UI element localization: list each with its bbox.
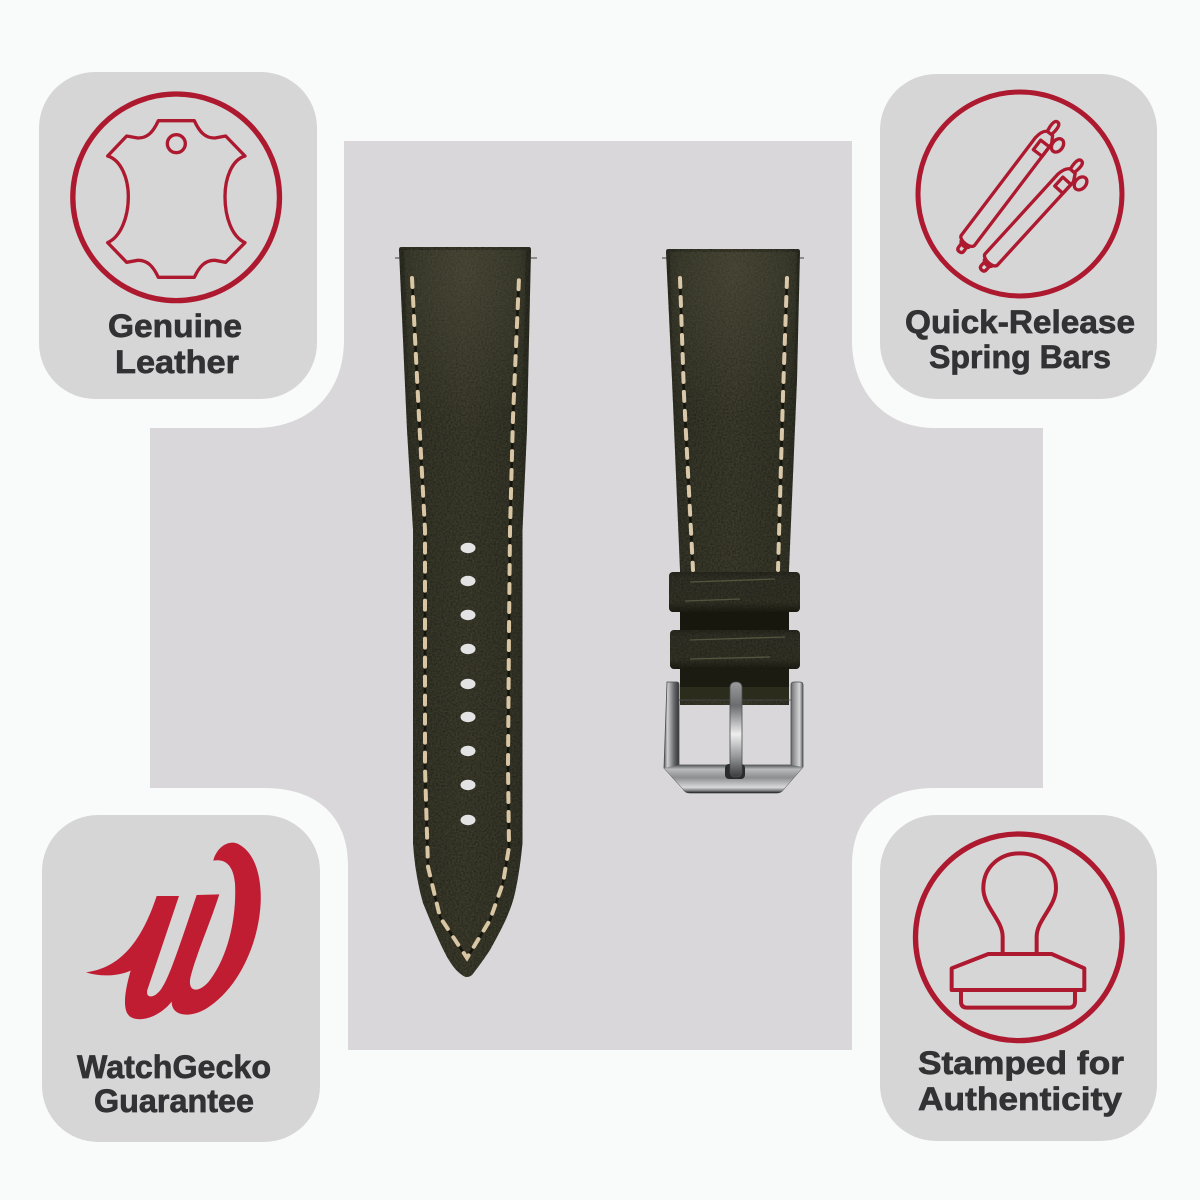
label: quick-release spring bars: Quick-Release — [905, 304, 1135, 340]
central grey backdrop — [150, 141, 1043, 1050]
icon: spring bars — [918, 92, 1122, 296]
stitching — [412, 278, 519, 958]
label: quick-release spring bars — [905, 304, 1135, 375]
label: watchgecko guarantee — [77, 1049, 271, 1119]
label: quick-release spring bars: Spring Bars — [929, 339, 1111, 375]
label: genuine leather: Leather — [115, 344, 239, 380]
label: stamped for authenticity: Stamped for — [918, 1045, 1124, 1081]
icon: watchgecko logo — [86, 843, 261, 1019]
stitching — [680, 278, 787, 570]
label: stamped for authenticity: Authenticity — [918, 1081, 1122, 1117]
label: genuine leather: Genuine — [108, 308, 242, 344]
panel: watchgecko guarantee — [42, 815, 320, 1142]
buckle pin — [725, 682, 745, 779]
label: genuine leather — [108, 308, 242, 380]
label: watchgecko guarantee: Guarantee — [94, 1083, 254, 1119]
label: watchgecko guarantee: WatchGecko — [77, 1049, 271, 1085]
panel: stamped for authenticity — [880, 815, 1157, 1141]
panel: genuine leather — [39, 72, 317, 399]
short strap piece with buckle — [662, 249, 804, 793]
buckle frame — [664, 682, 803, 793]
label: stamped for authenticity — [918, 1045, 1124, 1117]
strap holes — [460, 543, 476, 825]
icon: leather hide — [73, 94, 279, 301]
keeper loops — [669, 572, 800, 669]
panel: quick-release spring bars — [880, 74, 1157, 399]
icon: stamp — [915, 834, 1122, 1041]
long strap piece — [395, 247, 537, 977]
